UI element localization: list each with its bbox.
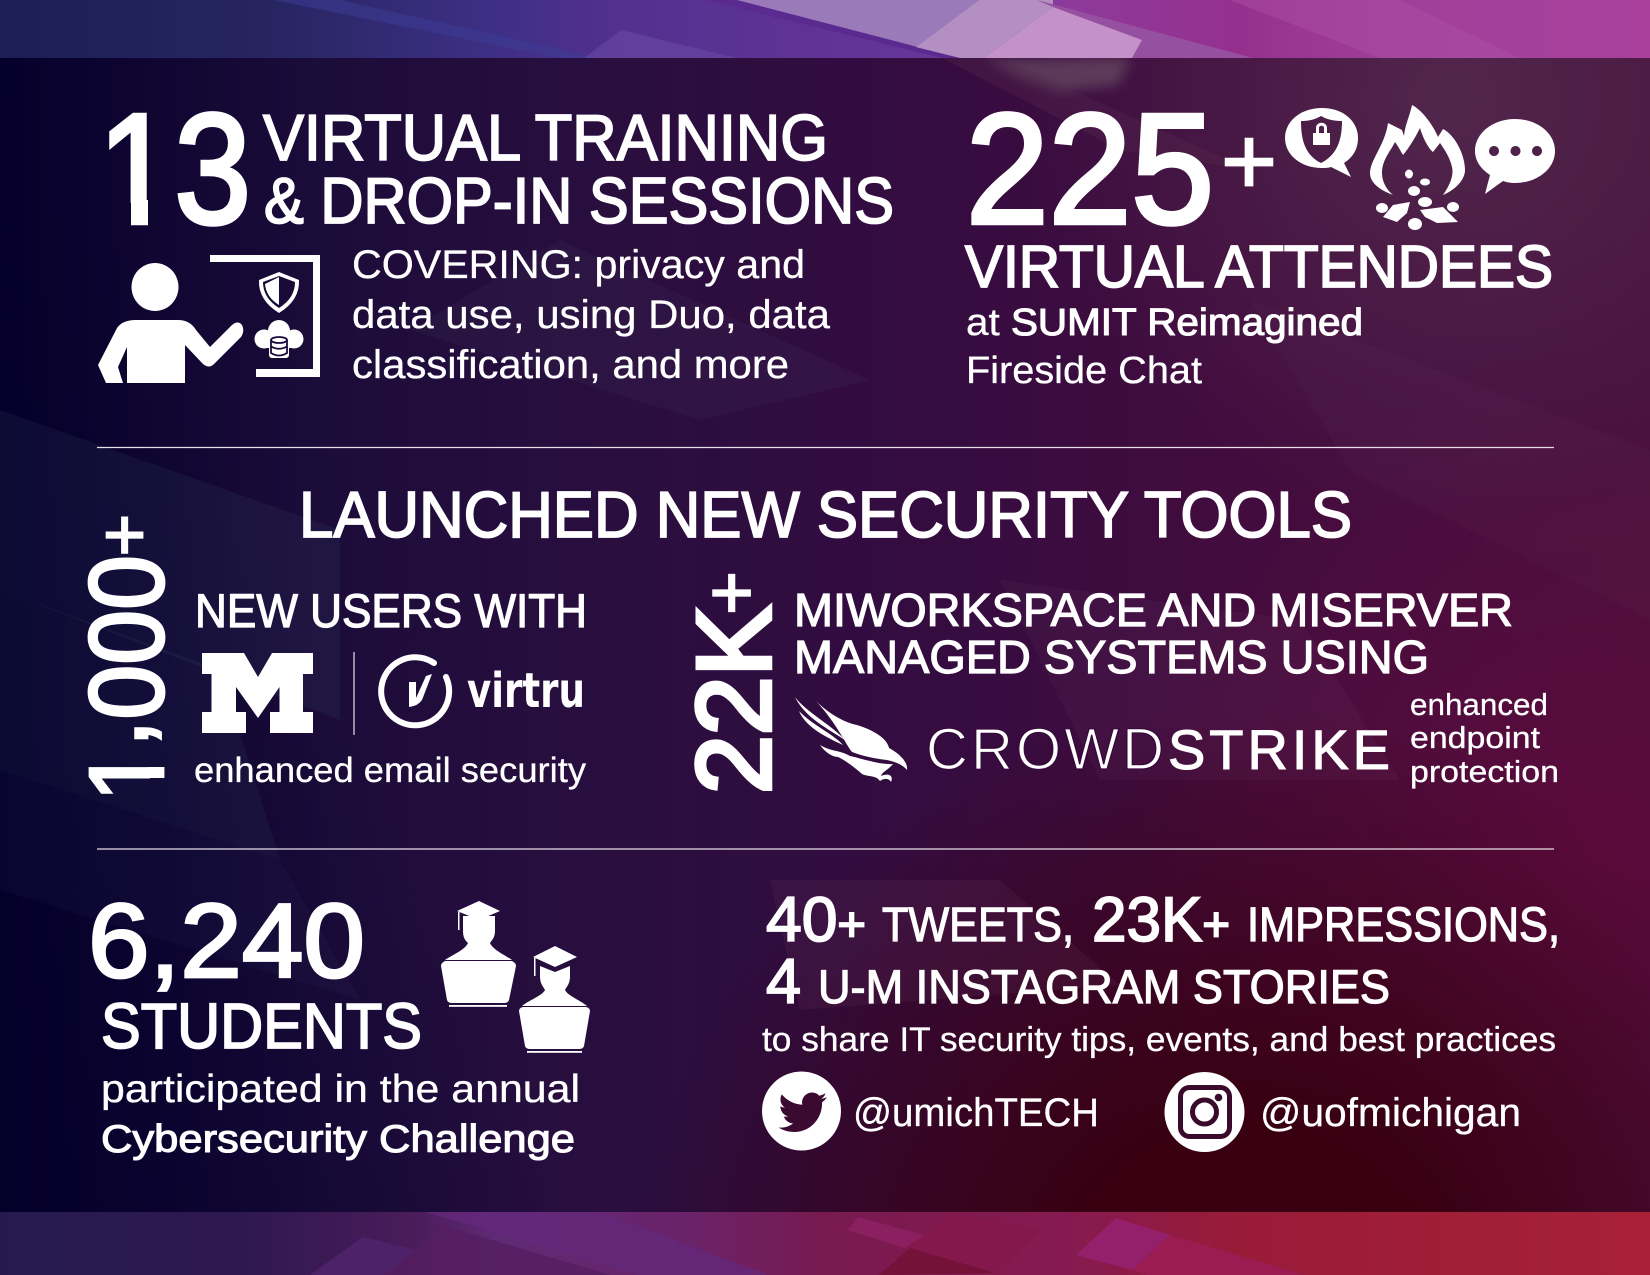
- heading: launched new security tools: LAUNCHED NEW SECURITY TOOLS: [299, 478, 1352, 551]
- text: cybersecurity challenge: [101, 1068, 580, 1161]
- logo divider: [353, 652, 355, 735]
- icon: instagram: [1164, 1072, 1244, 1152]
- heading: MiWorkspace and MiServer: MIWORKSPACE AND MISERVER: [794, 584, 1513, 636]
- heading: tweets and impressions: 40+: [766, 885, 866, 955]
- handle: umichTECH: @umichTECH: [853, 1091, 1099, 1135]
- heading: virtual training and drop-in sessions: VIRTUAL TRAINING: [263, 101, 828, 174]
- panel: students: [88, 883, 590, 1161]
- text: topics covered: COVERING: privacy and: [352, 243, 805, 287]
- rotated number 1,000+: 1: [68, 743, 186, 802]
- logo: virtru: virtru: [467, 663, 585, 719]
- heading: instagram stories: U-M INSTAGRAM STORIES: [818, 960, 1390, 1013]
- big number 225+: 225: [966, 82, 1214, 257]
- heading: virtual training and drop-in sessions: & DROP-IN SESSIONS: [264, 164, 894, 237]
- text: SUMIT Reimagined Fireside Chat: Fireside Chat: [966, 350, 1202, 392]
- big number 6,240: 6,240: [88, 883, 365, 1000]
- heading: virtual training and drop-in sessions: [263, 101, 894, 237]
- heading: tweets and impressions: TWEETS,: [882, 899, 1074, 952]
- background: top band: [0, 0, 1650, 58]
- caption: enhanced endpoint protection: protection: [1410, 754, 1559, 789]
- heading: tweets and impressions: IMPRESSIONS,: [1247, 899, 1560, 952]
- text: topics covered: data use, using Duo, data: [352, 293, 831, 337]
- text: cybersecurity challenge: Cybersecurity Challenge: [101, 1118, 575, 1161]
- caption: enhanced endpoint protection: enhanced: [1410, 687, 1548, 722]
- heading: MiWorkspace and MiServer: MANAGED SYSTEMS USING: [794, 631, 1429, 683]
- logo: CROWDSTRIKE wordmark: CROWD: [926, 717, 1164, 782]
- logo: virtru: [381, 657, 585, 725]
- logo: CrowdStrike falcon: [795, 697, 907, 782]
- divider lines: [97, 448, 1554, 849]
- caption: enhanced endpoint protection: [1410, 687, 1559, 789]
- icon: twitter: [762, 1072, 841, 1150]
- panel: training sessions: [98, 111, 892, 384]
- text: share tips: to share IT security tips, events, and best practices: [762, 1021, 1556, 1059]
- text: SUMIT Reimagined Fireside Chat: [966, 302, 1363, 392]
- rotated number 1,000+: +: [84, 514, 165, 556]
- background: bottom band: [0, 1212, 1650, 1275]
- big number 225+: +: [1221, 108, 1277, 215]
- text: topics covered: [352, 243, 831, 387]
- caption: enhanced endpoint protection: endpoint: [1410, 720, 1540, 755]
- rotated number 22K+: 22K: [676, 606, 793, 794]
- big number 13: 13: [98, 82, 251, 257]
- panel: virtual attendees: [965, 82, 1555, 392]
- heading: virtual attendees: VIRTUAL ATTENDEES: [965, 234, 1553, 300]
- heading: instagram stories: 4: [766, 947, 801, 1017]
- text: cybersecurity challenge: participated in the annual: [101, 1068, 580, 1111]
- heading: students: STUDENTS: [101, 990, 422, 1062]
- logo: block M: [202, 653, 313, 733]
- logo: CROWDSTRIKE wordmark: STRIKE: [1168, 718, 1390, 781]
- icon: presenter at a board: [98, 255, 320, 383]
- logo: CROWDSTRIKE wordmark: [926, 717, 1390, 782]
- caption: enhanced email security: enhanced email security: [194, 751, 587, 790]
- rotated number 22K+: +: [688, 571, 772, 615]
- icon: chat bubble: [1475, 119, 1555, 194]
- panel: social media: [762, 885, 1560, 1152]
- big number 13: [109, 111, 247, 227]
- rotated number 1,000+: 000: [68, 555, 186, 720]
- icon: graduate two: [519, 946, 590, 1053]
- heading: MiWorkspace and MiServer: [794, 584, 1513, 683]
- heading: new users with: NEW USERS WITH: [195, 584, 587, 637]
- heading: tweets and impressions: 23K+: [1092, 885, 1230, 955]
- handle: uofmichigan: @uofmichigan: [1260, 1091, 1521, 1135]
- icon: shield speech bubble: [1285, 108, 1358, 177]
- rotated number 1,000+: ,: [52, 720, 170, 747]
- panel: endpoint protection: [676, 571, 1559, 794]
- icon: campfire: [1370, 105, 1465, 230]
- heading: tweets and impressions: [766, 885, 1560, 955]
- rotated number 1,000+: [88, 516, 166, 794]
- icon: graduate one: [441, 901, 516, 1007]
- heading: instagram stories: [766, 947, 1390, 1017]
- panel: email security: [52, 514, 587, 802]
- text: SUMIT Reimagined Fireside Chat: at SUMIT Reimagined: [966, 302, 1363, 344]
- text: topics covered: classification, and more: [352, 343, 789, 387]
